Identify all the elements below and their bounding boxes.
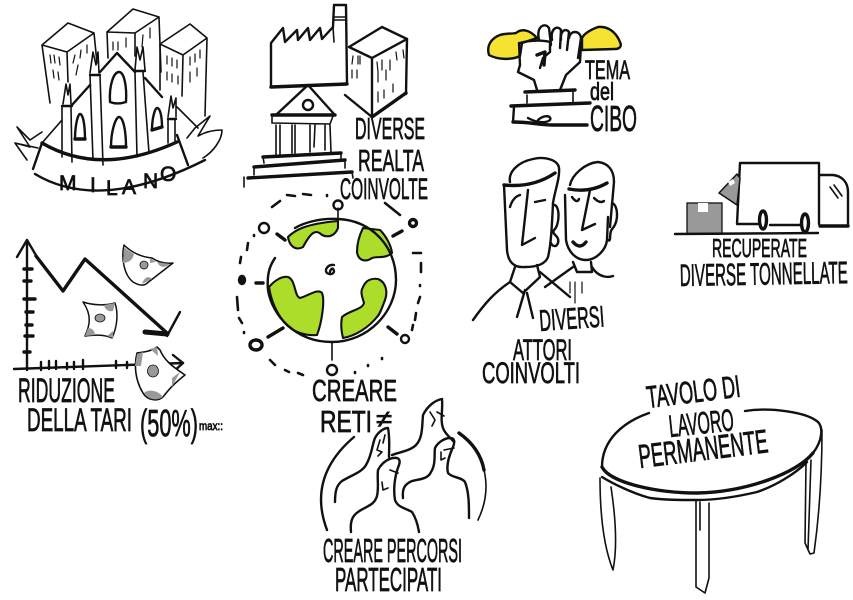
label: diverse realta coinvolte: REALTA: [358, 143, 424, 178]
panel: diverse realta coinvolte: [244, 5, 428, 206]
chart: falling line with axes: [14, 240, 183, 373]
land masses: [269, 221, 392, 338]
icon: man with hair: [473, 158, 570, 320]
icon: cuff: [511, 90, 590, 125]
label: riduzione della tari: [18, 372, 223, 445]
ground line: [675, 233, 818, 234]
label: tavolo di lavoro permanente: [636, 369, 770, 475]
label: tema del cibo: CIBO: [590, 98, 637, 139]
panel: tema del cibo: [488, 25, 637, 139]
icon: globe: [268, 218, 396, 342]
icon: banknote bottom: [135, 347, 185, 400]
icon: network nodes and dashes: [237, 194, 421, 375]
icon: factory: [271, 5, 347, 87]
label: creare reti: [312, 373, 397, 439]
panel: creare percorsi partecipati: [321, 399, 486, 598]
icon: middle tower: [107, 9, 161, 72]
icon: table: [600, 410, 822, 593]
label: recuperate diverse tonnellate: [680, 233, 848, 293]
icon: banknote middle: [83, 302, 117, 338]
icon: left tower: [42, 23, 97, 103]
label: diversi attori coinvolti: [482, 301, 605, 390]
label: riduzione della tari: RIDUZIONE: [18, 372, 115, 410]
panel: creare percorsi partecipati: CREARE PERCORSI: [323, 532, 462, 569]
label: tavolo di lavoro permanente: LAVORO: [667, 402, 735, 444]
label: creare reti: ≠: [376, 406, 392, 433]
icon: woman smiling: [545, 162, 617, 303]
icon: left bread: [488, 30, 537, 59]
icon: open tailgate: [719, 174, 740, 205]
label: creare percorsi partecipati: PARTECIPATI: [335, 561, 442, 598]
panel: recuperate diverse tonnellate: [675, 163, 848, 293]
icon: fist: [518, 25, 581, 90]
icon: parcel: [687, 203, 722, 234]
icon: Milano banner: [15, 116, 222, 191]
label: creare reti: RETI: [320, 404, 372, 439]
label: diverse realta coinvolte: COINVOLTE: [340, 173, 428, 206]
icon: truck: [737, 163, 848, 232]
label: creare percorsi partecipati: [323, 532, 462, 598]
label: diversi attori coinvolti: ATTORI: [513, 334, 572, 367]
icon: cathedral facade: [42, 47, 198, 165]
label: diversi attori coinvolti: DIVERSI: [538, 301, 605, 338]
panel: riduzione della tari: [14, 240, 223, 445]
panel: tavolo di lavoro permanente: [600, 369, 822, 593]
label: riduzione della tari: DELLA TARI: [27, 402, 132, 438]
label: diverse realta coinvolte: [340, 111, 428, 206]
label: tema del cibo: TEMA: [585, 55, 630, 85]
panel: globe network: [237, 194, 421, 439]
label: creare reti: CREARE: [312, 373, 397, 408]
icon: banknote top: [123, 245, 173, 285]
label: tema del cibo: del: [590, 78, 614, 106]
label: diverse realta coinvolte: DIVERSE: [355, 111, 425, 146]
icon: right tower: [160, 24, 207, 116]
panel: Milano cathedral and skyline: [15, 9, 222, 200]
icon: civic temple: [244, 85, 353, 187]
label: tavolo di lavoro permanente: TAVOLO DI: [645, 369, 742, 415]
panel: diversi attori coinvolti: [473, 158, 617, 390]
icon: right bread: [582, 27, 621, 50]
icon: group of people: [321, 399, 486, 532]
label: riduzione della tari: (50%): [140, 403, 198, 445]
label: tema del cibo: [585, 55, 637, 139]
label: Milano: MILANO: [59, 163, 176, 200]
label: diversi attori coinvolti: COINVOLTI: [482, 357, 580, 390]
icon: office block: [345, 27, 407, 117]
label: riduzione della tari: max::: [199, 419, 223, 433]
